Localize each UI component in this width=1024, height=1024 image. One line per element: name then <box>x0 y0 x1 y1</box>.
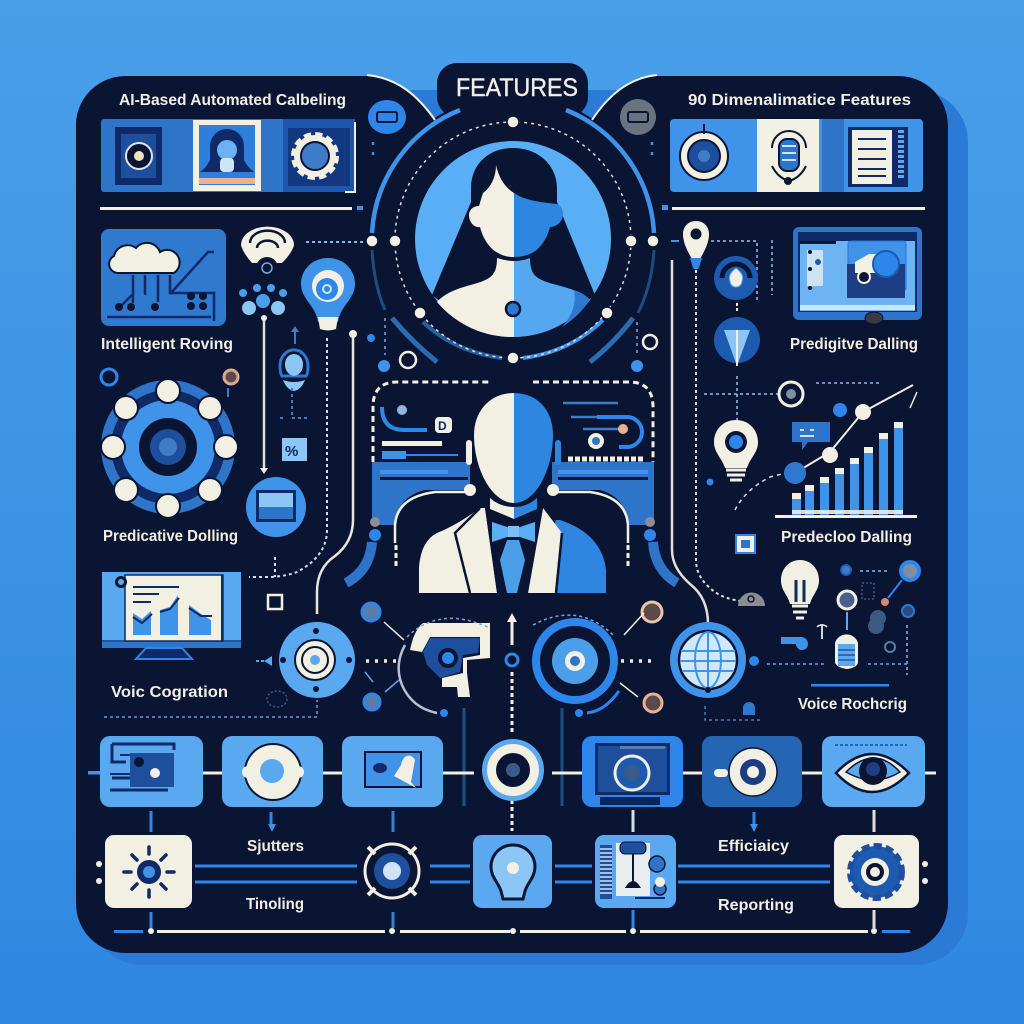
title badge: features <box>437 63 588 117</box>
center box around man <box>372 382 654 525</box>
label: voic cogration: Voic Cogration <box>111 684 228 701</box>
connector lines row 2 <box>151 810 874 928</box>
node: center right ring <box>532 615 619 717</box>
icon cluster: bulb and nodes <box>767 560 919 686</box>
label: predecloo dalling: Predecloo Dalling <box>781 529 912 546</box>
tile row 1: tile 5 <box>702 736 802 807</box>
chart: rising bars with trend line <box>735 385 917 518</box>
vertical line right <box>672 260 708 636</box>
satellite dots right of ring <box>620 99 657 372</box>
icon: circular screen <box>246 477 306 537</box>
main dark panel <box>76 75 948 953</box>
small square icon right <box>736 535 755 553</box>
icon: light bulb right <box>706 420 758 486</box>
node: center column arrow and line <box>464 613 562 831</box>
tile row 1: tile 2 <box>222 736 323 807</box>
tile row 1: tile 4 <box>582 736 683 807</box>
tile: predictive screen <box>793 227 922 324</box>
portrait: woman <box>415 141 611 337</box>
icon row 2: target ring <box>365 844 419 898</box>
node: head camera <box>399 618 490 717</box>
icon: gray dome <box>738 592 765 606</box>
hair <box>432 148 595 317</box>
node: globe <box>670 622 763 720</box>
icon: percent tile: % <box>285 443 298 460</box>
jacket <box>419 508 497 593</box>
node: small satellites <box>362 602 662 712</box>
small arrows under tiles <box>268 824 758 832</box>
label: tinoling: Tinoling <box>246 896 304 913</box>
top-right icon tiles <box>670 119 923 192</box>
tile row 1: tile 3 <box>342 736 443 807</box>
tile row 2: bulb <box>473 835 552 908</box>
icon: small badges around ring <box>101 369 238 397</box>
icon: location pin <box>671 221 772 602</box>
tile: cloud routing <box>101 229 226 326</box>
label: reporting: Reporting <box>718 897 794 914</box>
center eye node <box>482 739 544 801</box>
tile row 2: gear <box>834 835 928 908</box>
connector nodes near man <box>346 484 677 583</box>
tile row 1: tile 1 <box>100 736 203 807</box>
small square icon <box>268 595 282 609</box>
satellite dots left of ring <box>367 318 416 372</box>
man figure <box>419 393 606 593</box>
label: predigitve dalling: Predigitve Dalling <box>790 336 918 353</box>
label: efficiaicy: Efficiaicy <box>718 838 789 855</box>
icon: chat badge left <box>368 100 406 162</box>
bottom connector line <box>114 928 910 934</box>
top-left icon tiles <box>101 119 355 192</box>
divider left <box>100 206 363 210</box>
icon: circle lock <box>714 256 758 300</box>
icon: circle gem <box>714 303 760 366</box>
label: sjutters: Sjutters <box>247 838 304 855</box>
tile: monitor chart <box>102 572 241 659</box>
heading: right panel: 90 Dimenalimatice Features <box>688 92 911 109</box>
ring nodes <box>366 116 659 364</box>
divider right <box>662 205 925 210</box>
label: intelligent roving: Intelligent Roving <box>101 336 233 353</box>
label: voice rochcrig: Voice Rochcrig <box>798 696 907 713</box>
icon: target with cross line <box>704 376 882 421</box>
big portrait ring <box>372 110 654 362</box>
icon: light bulb pin <box>301 258 355 330</box>
icon: orbit ring <box>101 379 238 518</box>
title badge: features: FEATURES <box>456 74 578 102</box>
heading: left panel: AI-Based Automated Calbeling <box>119 92 346 109</box>
tile row 1: tile 6 eye <box>822 736 925 807</box>
label: predicative dolling: Predicative Dolling <box>103 528 238 545</box>
portrait: face and shoulders <box>437 165 590 337</box>
connection row top <box>88 771 936 774</box>
icon: dot cluster <box>239 284 287 315</box>
panel shadow <box>90 90 968 965</box>
icon: small person <box>280 326 308 418</box>
tile row 2: sun <box>96 835 192 908</box>
icon: wifi sensor <box>241 227 294 279</box>
tile row 2: diagram <box>595 835 676 908</box>
node: left ring <box>256 622 355 707</box>
center box around man: D <box>438 419 447 433</box>
connector lines left <box>104 242 366 717</box>
icon: percent tile <box>282 438 307 461</box>
